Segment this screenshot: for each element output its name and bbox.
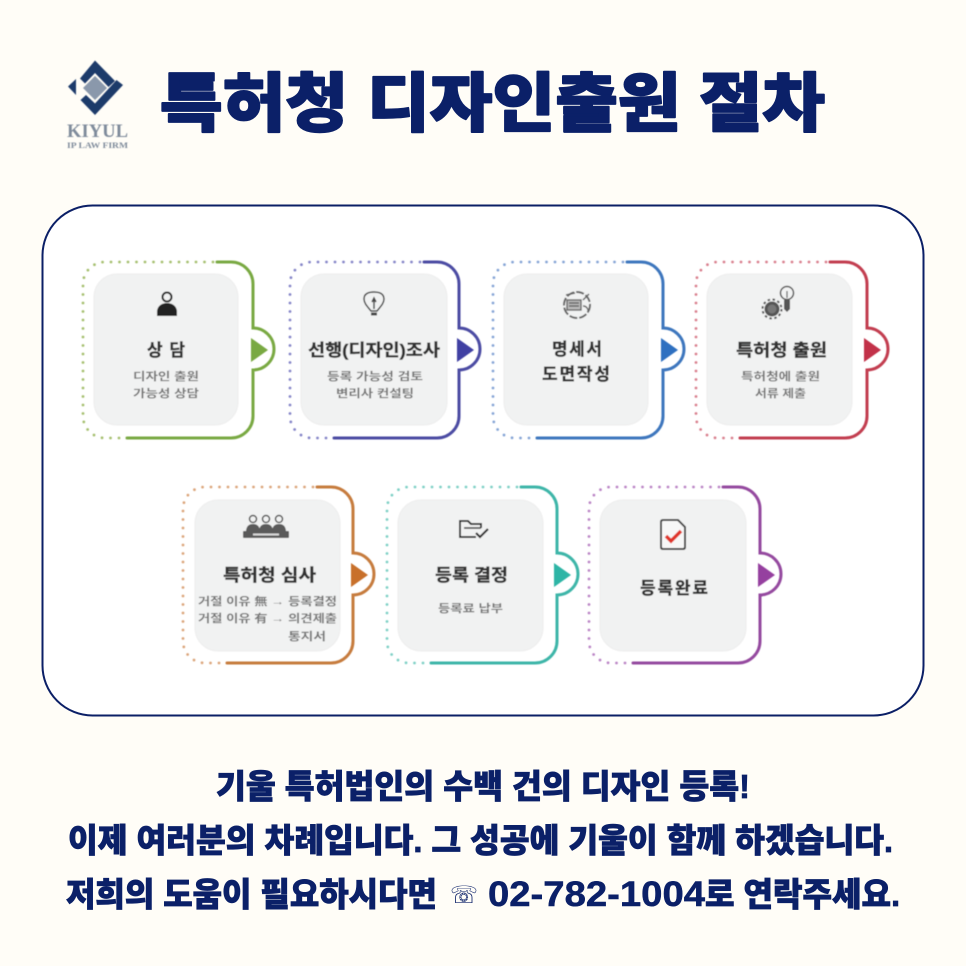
solid outline	[227, 487, 374, 663]
message line 3 with phone number: 로 연락주세요.	[705, 876, 900, 913]
arrow	[758, 563, 775, 587]
dotted outline	[696, 262, 826, 438]
step heading: 도면작성	[542, 365, 610, 384]
arrow	[864, 338, 881, 362]
step description	[198, 594, 337, 643]
message line 1: 기울 특허법인의 수백 건의 디자인 등록!	[216, 768, 750, 805]
solid outline	[633, 487, 781, 663]
step description: 거절 이유 有 → 의견제출	[198, 611, 337, 625]
logo wordmark: KIYUL	[67, 121, 128, 142]
logo subtitle: IP LAW FIRM	[67, 140, 128, 150]
card background	[707, 274, 852, 425]
card background	[398, 500, 543, 651]
card background	[94, 274, 238, 425]
step heading: 특허청 심사	[223, 566, 316, 585]
process step 6: registration decision	[387, 487, 578, 663]
message line 3 with phone number: ☏	[450, 881, 478, 909]
card background	[600, 500, 746, 651]
step description: 통지서	[288, 630, 326, 643]
step heading: 명세서	[552, 340, 602, 359]
solid outline	[740, 262, 888, 438]
dotted outline	[83, 262, 213, 438]
dotted outline	[493, 262, 623, 438]
process step 4: patent office filing	[696, 262, 888, 438]
step description: 거절 이유 無 → 등록결정	[198, 594, 337, 608]
dotted outline	[290, 262, 420, 438]
arrow	[351, 563, 368, 587]
solid outline	[127, 262, 274, 438]
logo: Kiyul IP Law Firm	[67, 60, 128, 150]
message line 2: 이제 여러분의 차례입니다. 그 성공에 기울이 함께 하겠습니다.	[68, 822, 893, 859]
closing message	[66, 768, 900, 914]
card background	[195, 500, 340, 651]
step heading	[542, 340, 610, 384]
message line 3 with phone number: 02-782-1004	[488, 875, 706, 914]
dotted outline	[589, 487, 719, 663]
title: 특허청 디자인출원 절차	[160, 68, 825, 140]
step description: 서류 제출	[755, 386, 806, 400]
card background	[301, 274, 447, 425]
logo mark	[68, 60, 123, 115]
icon: blueprint document	[564, 292, 590, 318]
solid outline	[334, 262, 480, 438]
step heading: 상 담	[147, 341, 185, 360]
icon: gear and bulb	[762, 286, 794, 318]
panel: process flow	[42, 206, 924, 716]
arrow	[661, 338, 678, 362]
solid outline	[431, 487, 578, 663]
step heading: 등록 결정	[435, 566, 508, 585]
step description: 특허청에 출원	[741, 369, 820, 383]
icon: examination panel	[243, 516, 289, 538]
step description	[741, 369, 820, 400]
arrow	[457, 338, 474, 362]
icon: light bulb	[364, 292, 384, 314]
arrow	[251, 338, 268, 362]
step heading: 등록완료	[640, 579, 708, 598]
arrow	[554, 563, 571, 587]
step description: 디자인 출원	[133, 369, 199, 383]
icon: person	[157, 292, 177, 316]
icon: document with red check	[661, 520, 685, 549]
step heading: 특허청 출원	[736, 341, 827, 360]
process step 5: patent office examination	[183, 487, 374, 663]
dotted outline	[183, 487, 313, 663]
icon: folder with check	[460, 521, 488, 537]
step description: 변리사 컨설팅	[336, 387, 414, 400]
process step 2: prior design search	[290, 262, 480, 438]
step description: 가능성 상담	[133, 386, 199, 400]
step description: 등록 가능성 검토	[327, 369, 423, 383]
process step 1: consultation	[83, 262, 274, 438]
step heading: 선행(디자인)조사	[308, 341, 440, 360]
step description	[133, 369, 199, 400]
step description	[327, 369, 423, 400]
dotted outline	[387, 487, 517, 663]
process step 7: registration complete	[589, 487, 781, 663]
process step 3: specification and drawings	[493, 262, 684, 438]
message line 3 with phone number: 저희의 도움이 필요하시다면	[66, 876, 437, 913]
message line 3 with phone number	[66, 875, 900, 914]
solid outline	[537, 262, 684, 438]
step description: 등록료 납부	[438, 601, 503, 615]
card background	[504, 274, 648, 425]
